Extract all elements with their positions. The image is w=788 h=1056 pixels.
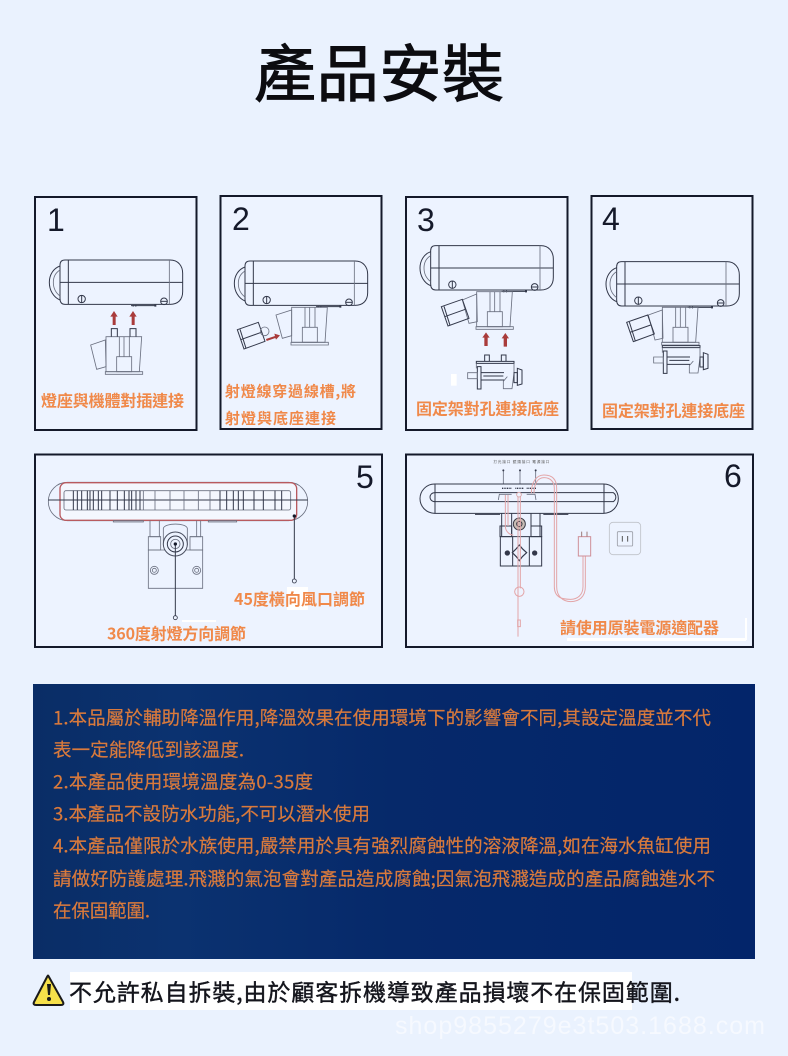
caption power adapter: 請使用原裝電源適配器	[560, 614, 719, 638]
watermark: shop9855279e3t503.1688.com	[395, 1012, 765, 1040]
note 4: 4.本產品僅限於水族使用,嚴禁用於具有強烈腐蝕性的溶液降溫,如在海水魚缸使用	[53, 832, 711, 858]
icon: warning triangle	[34, 976, 63, 1005]
panel: step 3	[406, 197, 568, 430]
title: 產品安裝	[254, 24, 504, 114]
note 1: 1.本品屬於輔助降溫作用,降溫效果在使用環境下的影響會不同,其設定溫度並不代	[53, 704, 711, 730]
port labels: 打光接口 鏡頭接口 電源接口	[493, 459, 550, 465]
caption 360 degree spotlight: 360度射燈方向調節	[107, 620, 246, 644]
panel: step 2	[220, 196, 382, 429]
step number 4: 4	[602, 201, 620, 237]
callout: 45 degree leader	[292, 514, 296, 583]
white retouch patches	[567, 618, 747, 641]
warning text: 不允許私自拆裝,由於顧客拆機導致產品損壞不在保固範圍.	[69, 974, 680, 1008]
callout: 360 degree leader	[173, 542, 177, 620]
note 4: 請做好防護處理.飛濺的氣泡會對產品造成腐蝕;因氣泡飛濺造成的產品腐蝕進水不	[53, 866, 715, 892]
red cables	[505, 495, 513, 535]
diagram: lamp body and base with arrows	[49, 260, 183, 374]
caption step 4: 固定架對孔連接底座	[602, 398, 745, 422]
note 1: 表一定能降低到該溫度.	[53, 736, 244, 762]
note 4: 在保固範圍.	[53, 898, 150, 924]
diagram: spotlight inserted into base	[234, 261, 368, 349]
diagram: bracket attached to base	[420, 246, 553, 389]
white retouch patches	[182, 587, 308, 622]
note 2: 2.本產品使用環境溫度為0-35度	[53, 768, 313, 794]
panel: usage notes	[33, 684, 755, 959]
step number 6: 6	[724, 458, 742, 494]
note 3: 3.本產品不設防水功能,不可以潛水使用	[53, 800, 370, 826]
step number 5: 5	[356, 459, 374, 495]
caption step 3: 固定架對孔連接底座	[416, 396, 559, 420]
step number 1: 1	[47, 202, 65, 238]
caption step 1: 燈座與機體對插連接	[41, 388, 184, 412]
power adapter	[578, 532, 591, 556]
step number 2: 2	[232, 201, 250, 237]
note 1	[53, 704, 711, 762]
panel: step 6	[406, 454, 753, 647]
note 4	[53, 832, 715, 924]
panel: step 5	[35, 454, 382, 647]
caption step 2 line 1: 射燈線穿過線槽,將	[225, 380, 356, 402]
panel: step 4	[592, 196, 752, 429]
step number 3: 3	[417, 202, 435, 238]
diagram: fully assembled unit	[606, 262, 739, 373]
wall socket	[609, 522, 641, 555]
diagram: wiring to power socket	[420, 459, 641, 637]
panel: step 1	[35, 197, 196, 430]
caption step 2 line 2: 射燈與底座連接	[225, 408, 336, 428]
caption 45 degree air vent: 45度橫向風口調節	[234, 586, 365, 610]
warning highlight band	[70, 972, 632, 1010]
diagram: front view with adjustment points	[48, 482, 308, 620]
stand	[502, 513, 540, 537]
